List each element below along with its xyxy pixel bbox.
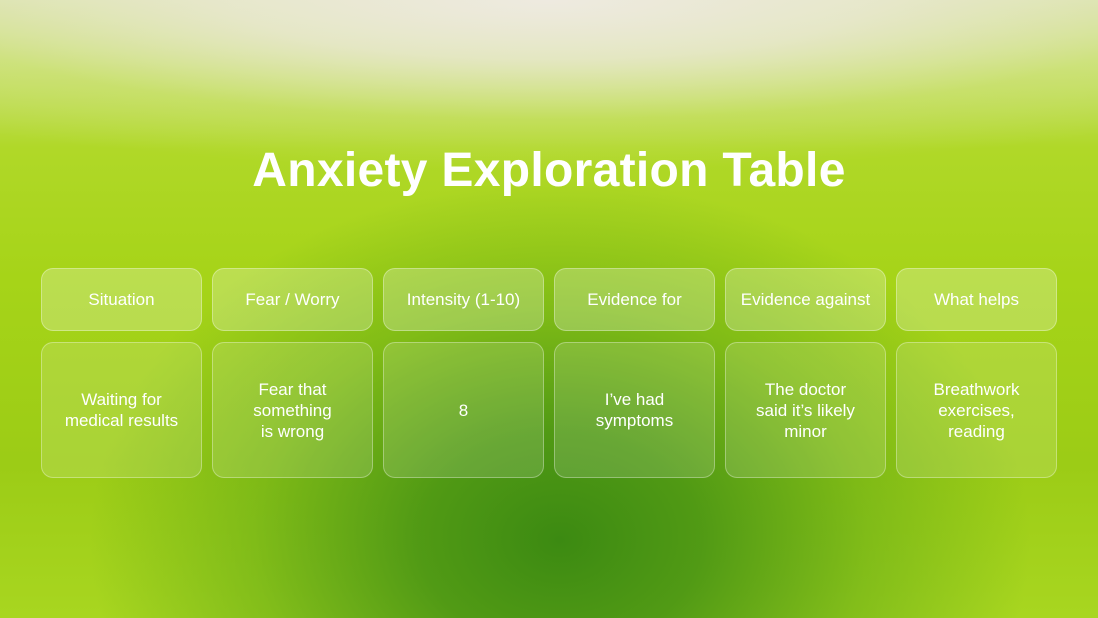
cell: what helps: exercises, — [938, 400, 1015, 420]
header: Evidence against — [725, 268, 886, 331]
header: Situation: Situation — [88, 290, 155, 309]
header: Situation — [41, 268, 202, 331]
cell: what helps — [896, 342, 1057, 478]
cell: intensity — [383, 342, 544, 478]
title: Anxiety Exploration Table — [252, 144, 846, 197]
cell: fear — [212, 342, 373, 478]
header: Evidence against: Evidence against — [741, 290, 870, 309]
cell: evidence against — [725, 342, 886, 478]
cell: fear: something — [253, 400, 332, 420]
header: Fear / Worry — [212, 268, 373, 331]
header: What helps: What helps — [934, 290, 1019, 309]
header: What helps — [896, 268, 1057, 331]
cell: evidence for: symptoms — [596, 411, 673, 430]
cell: situation: medical results — [65, 411, 178, 430]
cell: evidence for — [554, 342, 715, 478]
cell: situation: Waiting for — [81, 390, 162, 409]
cell: evidence against: minor — [784, 422, 827, 440]
cell: fear: Fear that — [258, 380, 327, 398]
header: Intensity: Intensity (1-10) — [407, 290, 520, 309]
cell: evidence against: said it’s likely — [756, 400, 855, 420]
header: Fear / Worry: Fear / Worry — [245, 290, 340, 309]
cell: evidence against: The doctor — [765, 380, 846, 398]
cell: what helps: reading — [948, 422, 1005, 440]
cell: intensity: 8 — [459, 400, 468, 420]
header: Evidence for — [554, 268, 715, 331]
header: Intensity — [383, 268, 544, 331]
cell: evidence for: I’ve had — [605, 390, 664, 409]
cell: fear: is wrong — [261, 422, 324, 440]
header: Evidence for: Evidence for — [587, 290, 682, 309]
cell: situation — [41, 342, 202, 478]
cell: what helps: Breathwork — [934, 380, 1019, 398]
